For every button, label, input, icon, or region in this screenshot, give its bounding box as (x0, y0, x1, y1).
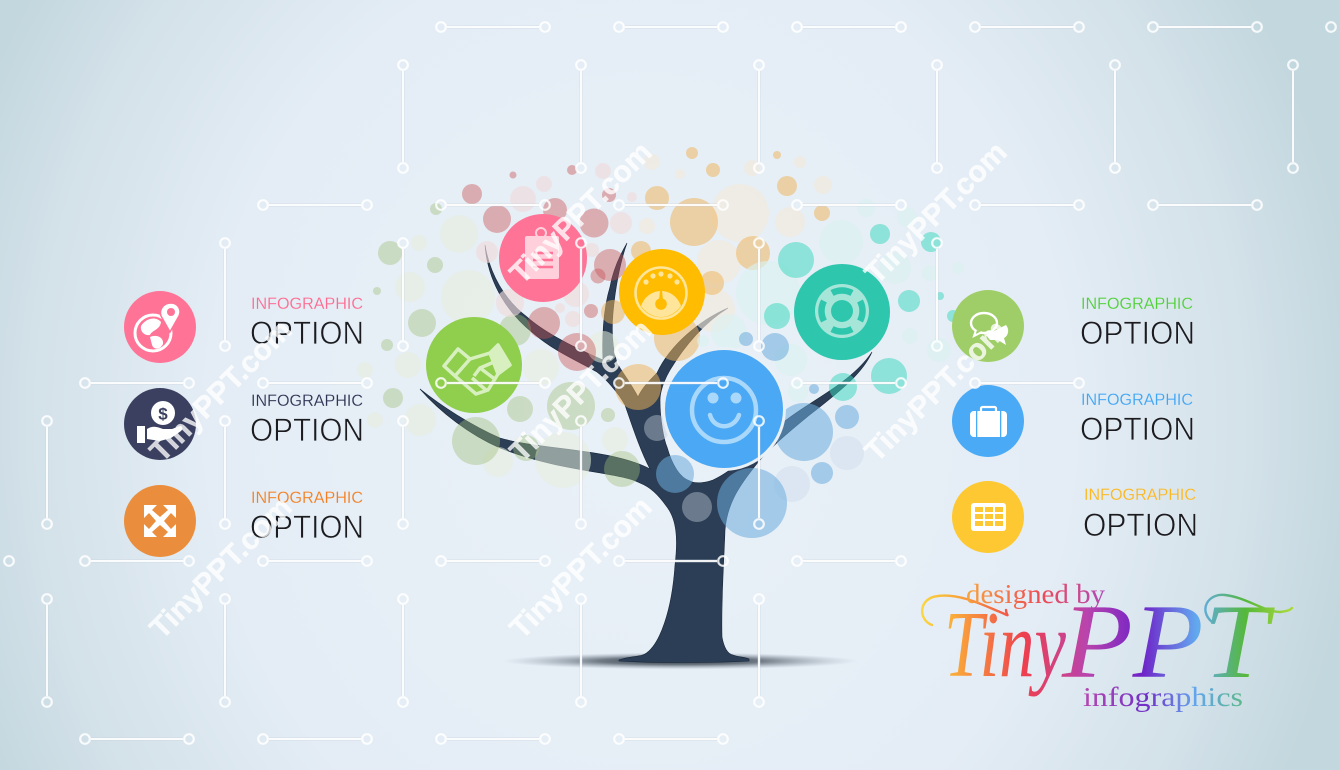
label 6: INFOGRAPHIC (1084, 485, 1196, 504)
main circle: pink document (499, 214, 587, 302)
label 6: OPTION (1083, 507, 1198, 543)
label 1: OPTION (250, 315, 364, 351)
label 1: INFOGRAPHIC (251, 294, 363, 313)
icon: globe with pin (135, 303, 180, 351)
label 4: OPTION (1080, 315, 1195, 351)
watermarks: TinyPPT.com (504, 314, 658, 468)
option 6: table (952, 481, 1024, 553)
watermarks: TinyPPT.com (859, 136, 1013, 290)
logo word: designed by: designed by (966, 579, 1106, 609)
watermarks: TinyPPT.com (144, 314, 298, 468)
icon: table grid (971, 503, 1006, 531)
option 3: expand arrows (124, 485, 196, 557)
tree trunk and branches (420, 243, 872, 662)
logo flourishes (922, 595, 1292, 625)
watermarks: TinyPPT.com (859, 314, 1013, 468)
icon: document (525, 228, 559, 279)
watermarks (144, 136, 1013, 645)
watermarks: TinyPPT.com (504, 136, 658, 290)
icon: hand with dollar: $ (158, 404, 168, 424)
option 2: money in hand (124, 388, 196, 460)
watermarks: TinyPPT.com (144, 491, 298, 645)
label 4 (1080, 294, 1195, 351)
label 5 (1080, 390, 1195, 447)
icon: chat bubbles (971, 313, 1008, 345)
option 4: chat (952, 290, 1024, 362)
pale pink bubbles (476, 163, 637, 327)
label 3: OPTION (250, 509, 364, 545)
pale cream bubbles (639, 154, 832, 332)
label 5: OPTION (1080, 411, 1195, 447)
icon: smiley (692, 378, 756, 442)
option 1: globe (124, 291, 196, 363)
icon: gauge (636, 268, 686, 318)
watermarks: TinyPPT.com (504, 491, 658, 645)
label 6 (1083, 485, 1198, 543)
label 5: INFOGRAPHIC (1081, 390, 1193, 409)
logo word: infographics: infographics (1083, 682, 1243, 712)
pale teal bubbles (697, 199, 964, 402)
main circle: teal lifebuoy (794, 264, 890, 360)
main circle: yellow gauge (619, 249, 705, 335)
logo word: Tiny: Tiny (944, 593, 1066, 697)
orange bubbles (601, 147, 830, 410)
label 3 (250, 488, 364, 545)
main circle: green handshake (426, 317, 522, 413)
logo word: PPT: PPT (1061, 583, 1276, 700)
icon: handshake (444, 345, 510, 394)
ground shadow (502, 652, 858, 670)
main circle: blue smiley (662, 347, 786, 471)
label 2: INFOGRAPHIC (251, 391, 363, 410)
option 5: briefcase (952, 385, 1024, 457)
red bubbles (462, 165, 626, 371)
icon: briefcase (970, 407, 1007, 437)
green bubbles (373, 203, 640, 487)
icon: lifebuoy (815, 284, 869, 338)
grey bubbles on trunk (644, 415, 712, 522)
label 4: INFOGRAPHIC (1081, 294, 1193, 313)
pale green bubbles (357, 215, 628, 488)
icon: four arrows (144, 505, 176, 537)
pale blue bubbles (774, 436, 864, 502)
teal bubbles (764, 224, 959, 401)
label 2 (250, 391, 364, 448)
blue bubbles (656, 332, 859, 538)
option labels left (250, 294, 364, 545)
option labels right (1080, 294, 1198, 543)
logo: designed by TinyPPT infographics (922, 579, 1292, 712)
label 3: INFOGRAPHIC (251, 488, 363, 507)
bubble cluster (357, 147, 964, 538)
label 1 (250, 294, 364, 351)
label 2: OPTION (250, 412, 364, 448)
